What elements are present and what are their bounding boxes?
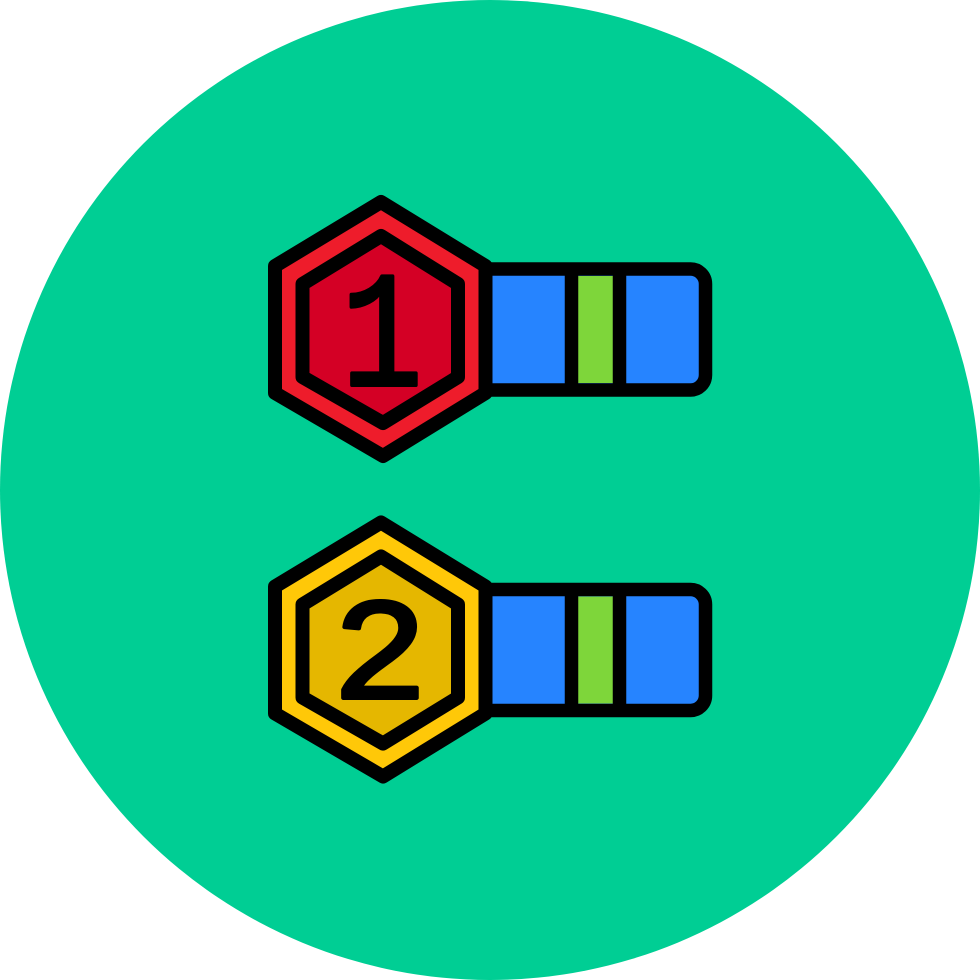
number 2: 2 (332, 577, 428, 742)
outer hexagon 1 (275, 202, 486, 456)
badge 1: red hexagon medal with ribbon (275, 202, 706, 456)
inner hexagon 1 (302, 236, 458, 423)
badge 2: yellow hexagon medal with ribbon (275, 522, 706, 776)
outer hexagon 2 (275, 522, 486, 776)
ribbon 2 (485, 589, 706, 711)
ribbon 1 (485, 269, 706, 390)
number 1: 1 (341, 248, 423, 435)
inner hexagon 2 (302, 556, 458, 744)
